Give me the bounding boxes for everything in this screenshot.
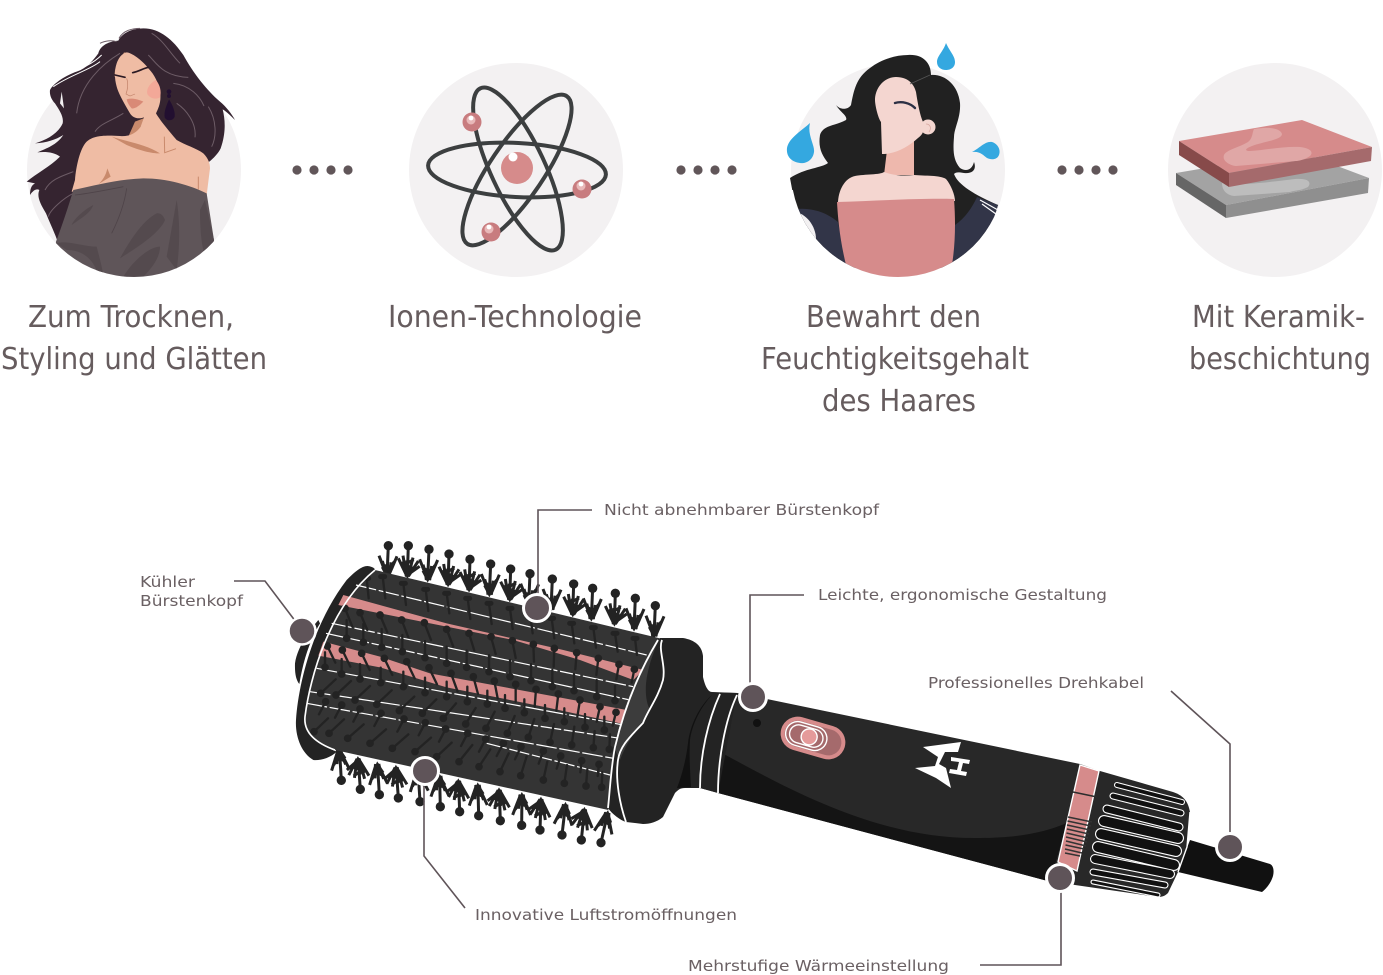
top bristle tufts	[379, 541, 664, 639]
heading: Zum Trocknen, Styling und Glätten: Zum Trocknen,	[28, 300, 234, 335]
callout: Nicht abnehmbarer Bürstenkopf	[524, 501, 880, 622]
heading: Bewahrt den Feuchtigkeitsgehalt des Haares: des Haares	[822, 384, 976, 419]
panel: drying and styling woman illustration	[27, 28, 241, 287]
heading: Bewahrt den Feuchtigkeitsgehalt des Haares: Feuchtigkeitsgehalt	[761, 342, 1029, 377]
illustration: hot air brush	[140, 501, 1274, 975]
barrel neck cap	[608, 638, 737, 824]
panel: moisture retention woman illustration	[787, 43, 1005, 290]
heading: Zum Trocknen, Styling und Glätten	[1, 300, 267, 377]
callout: Kühler Bürstenkopf: Kühler	[140, 573, 196, 591]
callout: Mehrstufige Wärmeeinstellung: Mehrstufige Wärmeeinstellung	[688, 957, 949, 975]
callout: Professionelles Drehkabel	[928, 674, 1244, 860]
connector dots 2	[676, 165, 737, 175]
off-shoulder dress	[53, 178, 214, 287]
cable	[1178, 840, 1274, 892]
barrel dashed lines	[307, 585, 647, 775]
icon: water drop top	[937, 43, 955, 70]
pink barrel stripes	[338, 595, 643, 680]
earring	[164, 89, 175, 120]
callout: Innovative Luftstromöffnungen	[412, 758, 737, 924]
face and shoulders	[114, 52, 146, 137]
callout: Leichte, ergonomische Gestaltung	[740, 586, 1107, 710]
brush handle	[700, 692, 1274, 897]
barrel outline	[305, 570, 375, 750]
callout: Innovative Luftstromöffnungen: Innovative Luftstromöffnungen	[475, 906, 737, 924]
callout: Nicht abnehmbarer Bürstenkopf: Nicht abnehmbarer Bürstenkopf	[604, 501, 880, 519]
panel: ceramic coating plates	[1168, 63, 1382, 277]
heading: Mit Keramikbeschichtung	[1189, 300, 1371, 377]
bottom bristle tufts	[329, 746, 616, 849]
callout: Mehrstufige Wärmeeinstellung	[688, 864, 1074, 975]
heading: Bewahrt den Feuchtigkeitsgehalt des Haares: Bewahrt den	[806, 300, 981, 335]
callout: Leichte, ergonomische Gestaltung: Leichte, ergonomische Gestaltung	[818, 586, 1107, 604]
back cap	[296, 566, 375, 760]
callout: Kühler Bürstenkopf	[140, 573, 316, 644]
heading: Ionen-Technologie: Ionen-Technologie	[388, 300, 642, 335]
connector dots 3	[1057, 165, 1118, 175]
callout: Kühler Bürstenkopf: Bürstenkopf	[140, 592, 244, 610]
heading: Zum Trocknen, Styling und Glätten: Styling und Glätten	[1, 342, 267, 377]
brush barrel	[305, 570, 660, 810]
power switch	[777, 713, 849, 763]
icon: water drop left	[787, 123, 814, 163]
heading: Bewahrt den Feuchtigkeitsgehalt des Haares	[761, 300, 1029, 419]
dial grip slots	[1093, 785, 1182, 895]
heading: Mit Keramikbeschichtung: Mit Keramik-	[1192, 300, 1365, 335]
panel: ion technology atom icon	[409, 63, 623, 277]
inner bristles	[314, 577, 637, 787]
flowing hair	[27, 28, 235, 243]
temperature band	[1058, 765, 1099, 871]
brand logo	[915, 742, 970, 788]
icon: water drop right	[972, 142, 1000, 159]
callout: Professionelles Drehkabel: Professionelles Drehkabel	[928, 674, 1144, 692]
connector dots 1	[292, 165, 353, 175]
